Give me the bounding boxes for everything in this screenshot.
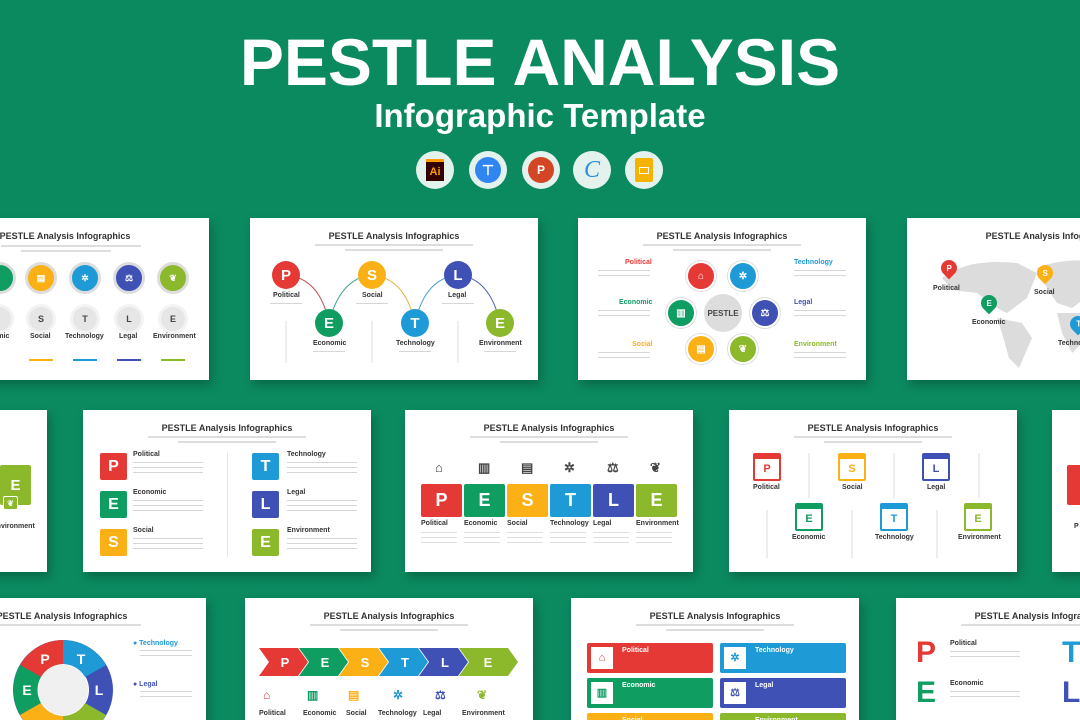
card: letter grid: Social (133, 527, 154, 534)
card: circle icons (partial left): E (170, 314, 176, 324)
card: PESTLE blocks: Political (421, 520, 448, 527)
card: world map (partial right): Economic (972, 319, 1005, 326)
card: letter grid: Environment (287, 527, 330, 534)
card: PESTLE blocks: E (478, 490, 490, 510)
card: row2 partial right (1052, 410, 1080, 572)
card: calendars (729, 410, 1017, 572)
card: circle icons (partial left): T (82, 314, 88, 324)
card: chevrons: ❦ (477, 688, 487, 702)
card: chevrons: Technology (378, 710, 417, 717)
card: circle icons (partial left): Environment (153, 333, 196, 340)
card: big letters (partial right): Economic (950, 680, 983, 687)
card title: PESTLE Analysis Infographics (0, 611, 127, 621)
card: letter grid: P (108, 458, 119, 474)
card: colored bars: Political (622, 647, 649, 654)
card: calendars: Social (842, 484, 863, 491)
card: donut: P (40, 651, 50, 667)
card: row2 partial right: P (1074, 523, 1079, 530)
card: big letters (partial right): P (916, 636, 936, 669)
card: hexagon PESTLE: ❦ (739, 344, 747, 354)
card: colored bars: ⌂ (599, 652, 605, 664)
card: world map (partial right) (907, 218, 1080, 380)
card: calendars: T (891, 513, 897, 525)
card: circle icons (partial left): Social (30, 333, 51, 340)
card: colored bars: Technology (755, 647, 794, 654)
card: world map (partial right): Political (933, 285, 960, 292)
card: chevrons: ⚖ (435, 688, 446, 702)
card: hexagon PESTLE: Economic (619, 299, 652, 306)
card title: PESTLE Analysis Infographics (162, 423, 292, 433)
card: donut: L (95, 682, 104, 698)
card title: PESTLE Analysis Infographics (657, 231, 787, 241)
card: PESTLE blocks: L (608, 490, 619, 510)
card title: PESTLE Analysis Infographics (484, 423, 614, 433)
card: donut: ● Legal (133, 681, 157, 688)
card: letter grid: S (108, 534, 119, 550)
card: hexagon PESTLE: ⌂ (698, 270, 704, 282)
card: PESTLE blocks: ✲ (564, 460, 575, 475)
card: PESTLE blocks: Environment (636, 520, 679, 527)
card: circle icons (partial left): ▤ (37, 272, 45, 282)
card: chevrons: Social (346, 710, 367, 717)
card title: PESTLE Analysis Infographics (329, 231, 459, 241)
card: PESTLE blocks: T (565, 490, 576, 510)
card: circle icons (partial left): ✲ (81, 272, 89, 282)
card: calendars: L (933, 463, 939, 475)
card: chevrons: ▤ (348, 688, 359, 702)
icon: illustrator: Ai (430, 166, 440, 178)
card: donut: ● Technology (133, 640, 178, 647)
card: circle icons (partial left): ⚖ (125, 272, 133, 282)
card: row2 partial left (0, 410, 47, 572)
icon: canva (573, 151, 611, 189)
card: donut: T (77, 651, 86, 667)
card: hexagon PESTLE: Social (632, 341, 653, 348)
card: world map (partial right): E (986, 298, 992, 308)
card: letter grid: Economic (133, 489, 166, 496)
card: hexagon PESTLE: Legal (794, 299, 812, 306)
card: big letters (partial right): T (1062, 636, 1080, 669)
card: PESTLE blocks: P (435, 490, 448, 510)
card: hexagon PESTLE: ▥ (676, 308, 686, 318)
card: world map (partial right): Social (1034, 289, 1055, 296)
card: calendars: P (763, 463, 771, 475)
card: circle icons (partial left): L (126, 314, 132, 324)
title: PESTLE ANALYSIS (240, 25, 840, 99)
card: hexagon PESTLE (578, 218, 866, 380)
card: colored bars: Economic (622, 682, 655, 689)
card: row2 partial left: E (10, 476, 20, 494)
card: semicircle PESTLE: E (324, 314, 334, 332)
card title: PESTLE Analysis Infographics (808, 423, 938, 433)
card: PESTLE blocks: ❦ (650, 460, 661, 475)
card: semicircle PESTLE: P (281, 266, 291, 284)
card: chevrons: ⌂ (263, 688, 270, 702)
card: semicircle PESTLE: Technology (396, 340, 435, 347)
card: PESTLE blocks: Legal (593, 520, 611, 527)
icon: illustrator (416, 151, 454, 189)
card: hexagon PESTLE: Political (625, 259, 652, 266)
card: colored bars (571, 598, 859, 720)
card: chevrons: ✲ (393, 688, 403, 702)
card: circle icons (partial left) (0, 218, 209, 380)
card: semicircle PESTLE (250, 218, 538, 380)
card: PESTLE blocks: ⚖ (607, 460, 619, 475)
card title: PESTLE Analysis Infographics (324, 611, 454, 621)
card: big letters (partial right): Political (950, 640, 977, 647)
icon: powerpoint: P (537, 163, 545, 177)
card: letter grid: Legal (287, 489, 305, 496)
card: chevrons (245, 598, 533, 720)
card: PESTLE blocks: ⌂ (435, 460, 443, 475)
card: semicircle PESTLE: S (367, 266, 377, 284)
card: colored bars: ✲ (730, 652, 740, 664)
icon: keynote (469, 151, 507, 189)
card: big letters (partial right): L (1062, 676, 1080, 709)
card: chevrons: Political (259, 710, 286, 717)
card: world map (partial right): S (1042, 268, 1048, 278)
card: letter grid (83, 410, 371, 572)
card: hexagon PESTLE: ⚖ (761, 308, 769, 318)
card: chevrons: Economic (303, 710, 336, 717)
card: semicircle PESTLE: E (495, 314, 505, 332)
icon: google slides (625, 151, 663, 189)
card: chevrons: L (441, 655, 449, 670)
card title: PESTLE Analysis Infographics (650, 611, 780, 621)
card: PESTLE blocks: E (650, 490, 662, 510)
icon: canva: C (584, 156, 600, 182)
card: calendars: Legal (927, 484, 945, 491)
card: letter grid: L (261, 496, 270, 512)
card: letter grid: Political (133, 451, 160, 458)
card: circle icons (partial left): Technology (65, 333, 104, 340)
card: colored bars: Legal (755, 682, 773, 689)
software icons row (416, 151, 663, 189)
card: calendars: Technology (875, 534, 914, 541)
card: colored bars: ⚖ (730, 687, 740, 699)
card: big letters (partial right): E (916, 676, 936, 709)
card title: PESTLE Analysis Infographics (0, 231, 130, 241)
card: PESTLE blocks (405, 410, 693, 572)
card: chevrons: Legal (423, 710, 441, 717)
subtitle: Infographic Template (374, 97, 706, 134)
card: calendars: S (848, 463, 856, 475)
card: letter grid: E (260, 534, 271, 550)
card: hexagon PESTLE: ▤ (696, 344, 706, 354)
card: hexagon PESTLE: Environment (794, 341, 837, 348)
card: chevrons: E (484, 655, 493, 670)
card: circle icons (partial left): S (38, 314, 44, 324)
card: semicircle PESTLE: Political (273, 292, 300, 299)
card: calendars: Political (753, 484, 780, 491)
card: PESTLE blocks: Economic (464, 520, 497, 527)
card: circle icons (partial left): Legal (119, 333, 137, 340)
card: donut: E (22, 682, 32, 698)
card: hexagon PESTLE: ✲ (739, 270, 747, 282)
card: big letters (partial right) (896, 598, 1080, 720)
card: PESTLE blocks: ▤ (521, 460, 533, 475)
card: chevrons: E (321, 655, 330, 670)
card: letter grid: Technology (287, 451, 326, 458)
icon: keynote: ⊤ (482, 162, 494, 178)
card: semicircle PESTLE: T (410, 314, 420, 332)
card: semicircle PESTLE: Environment (479, 340, 522, 347)
card: PESTLE blocks: Social (507, 520, 528, 527)
card: row2 partial left: ❦ (7, 498, 14, 508)
card: donut (0, 598, 206, 720)
card: PESTLE blocks: Technology (550, 520, 589, 527)
card: circle icons (partial left): ❦ (169, 272, 177, 282)
card: PESTLE blocks: ▥ (478, 460, 490, 475)
card: world map (partial right): P (946, 264, 952, 272)
card: chevrons: T (401, 655, 409, 670)
card: semicircle PESTLE: L (453, 266, 463, 284)
card: letter grid: T (261, 458, 270, 474)
card: hexagon PESTLE: PESTLE (707, 308, 739, 318)
card: semicircle PESTLE: Legal (448, 292, 466, 299)
card: chevrons: P (281, 655, 290, 670)
card: chevrons: ▥ (307, 688, 318, 702)
card: calendars: Economic (792, 534, 825, 541)
card: calendars: Environment (958, 534, 1001, 541)
card: PESTLE blocks: S (521, 490, 534, 510)
card: calendars: E (805, 513, 813, 525)
card: hexagon PESTLE: Technology (794, 259, 833, 266)
card: letter grid: E (108, 496, 119, 512)
card: semicircle PESTLE: Social (362, 292, 383, 299)
card: semicircle PESTLE: Economic (313, 340, 346, 347)
card: calendars: E (974, 513, 982, 525)
icon: powerpoint (522, 151, 560, 189)
card: colored bars: ▥ (597, 687, 607, 699)
card: chevrons: S (361, 655, 370, 670)
card: chevrons: Environment (462, 710, 505, 717)
